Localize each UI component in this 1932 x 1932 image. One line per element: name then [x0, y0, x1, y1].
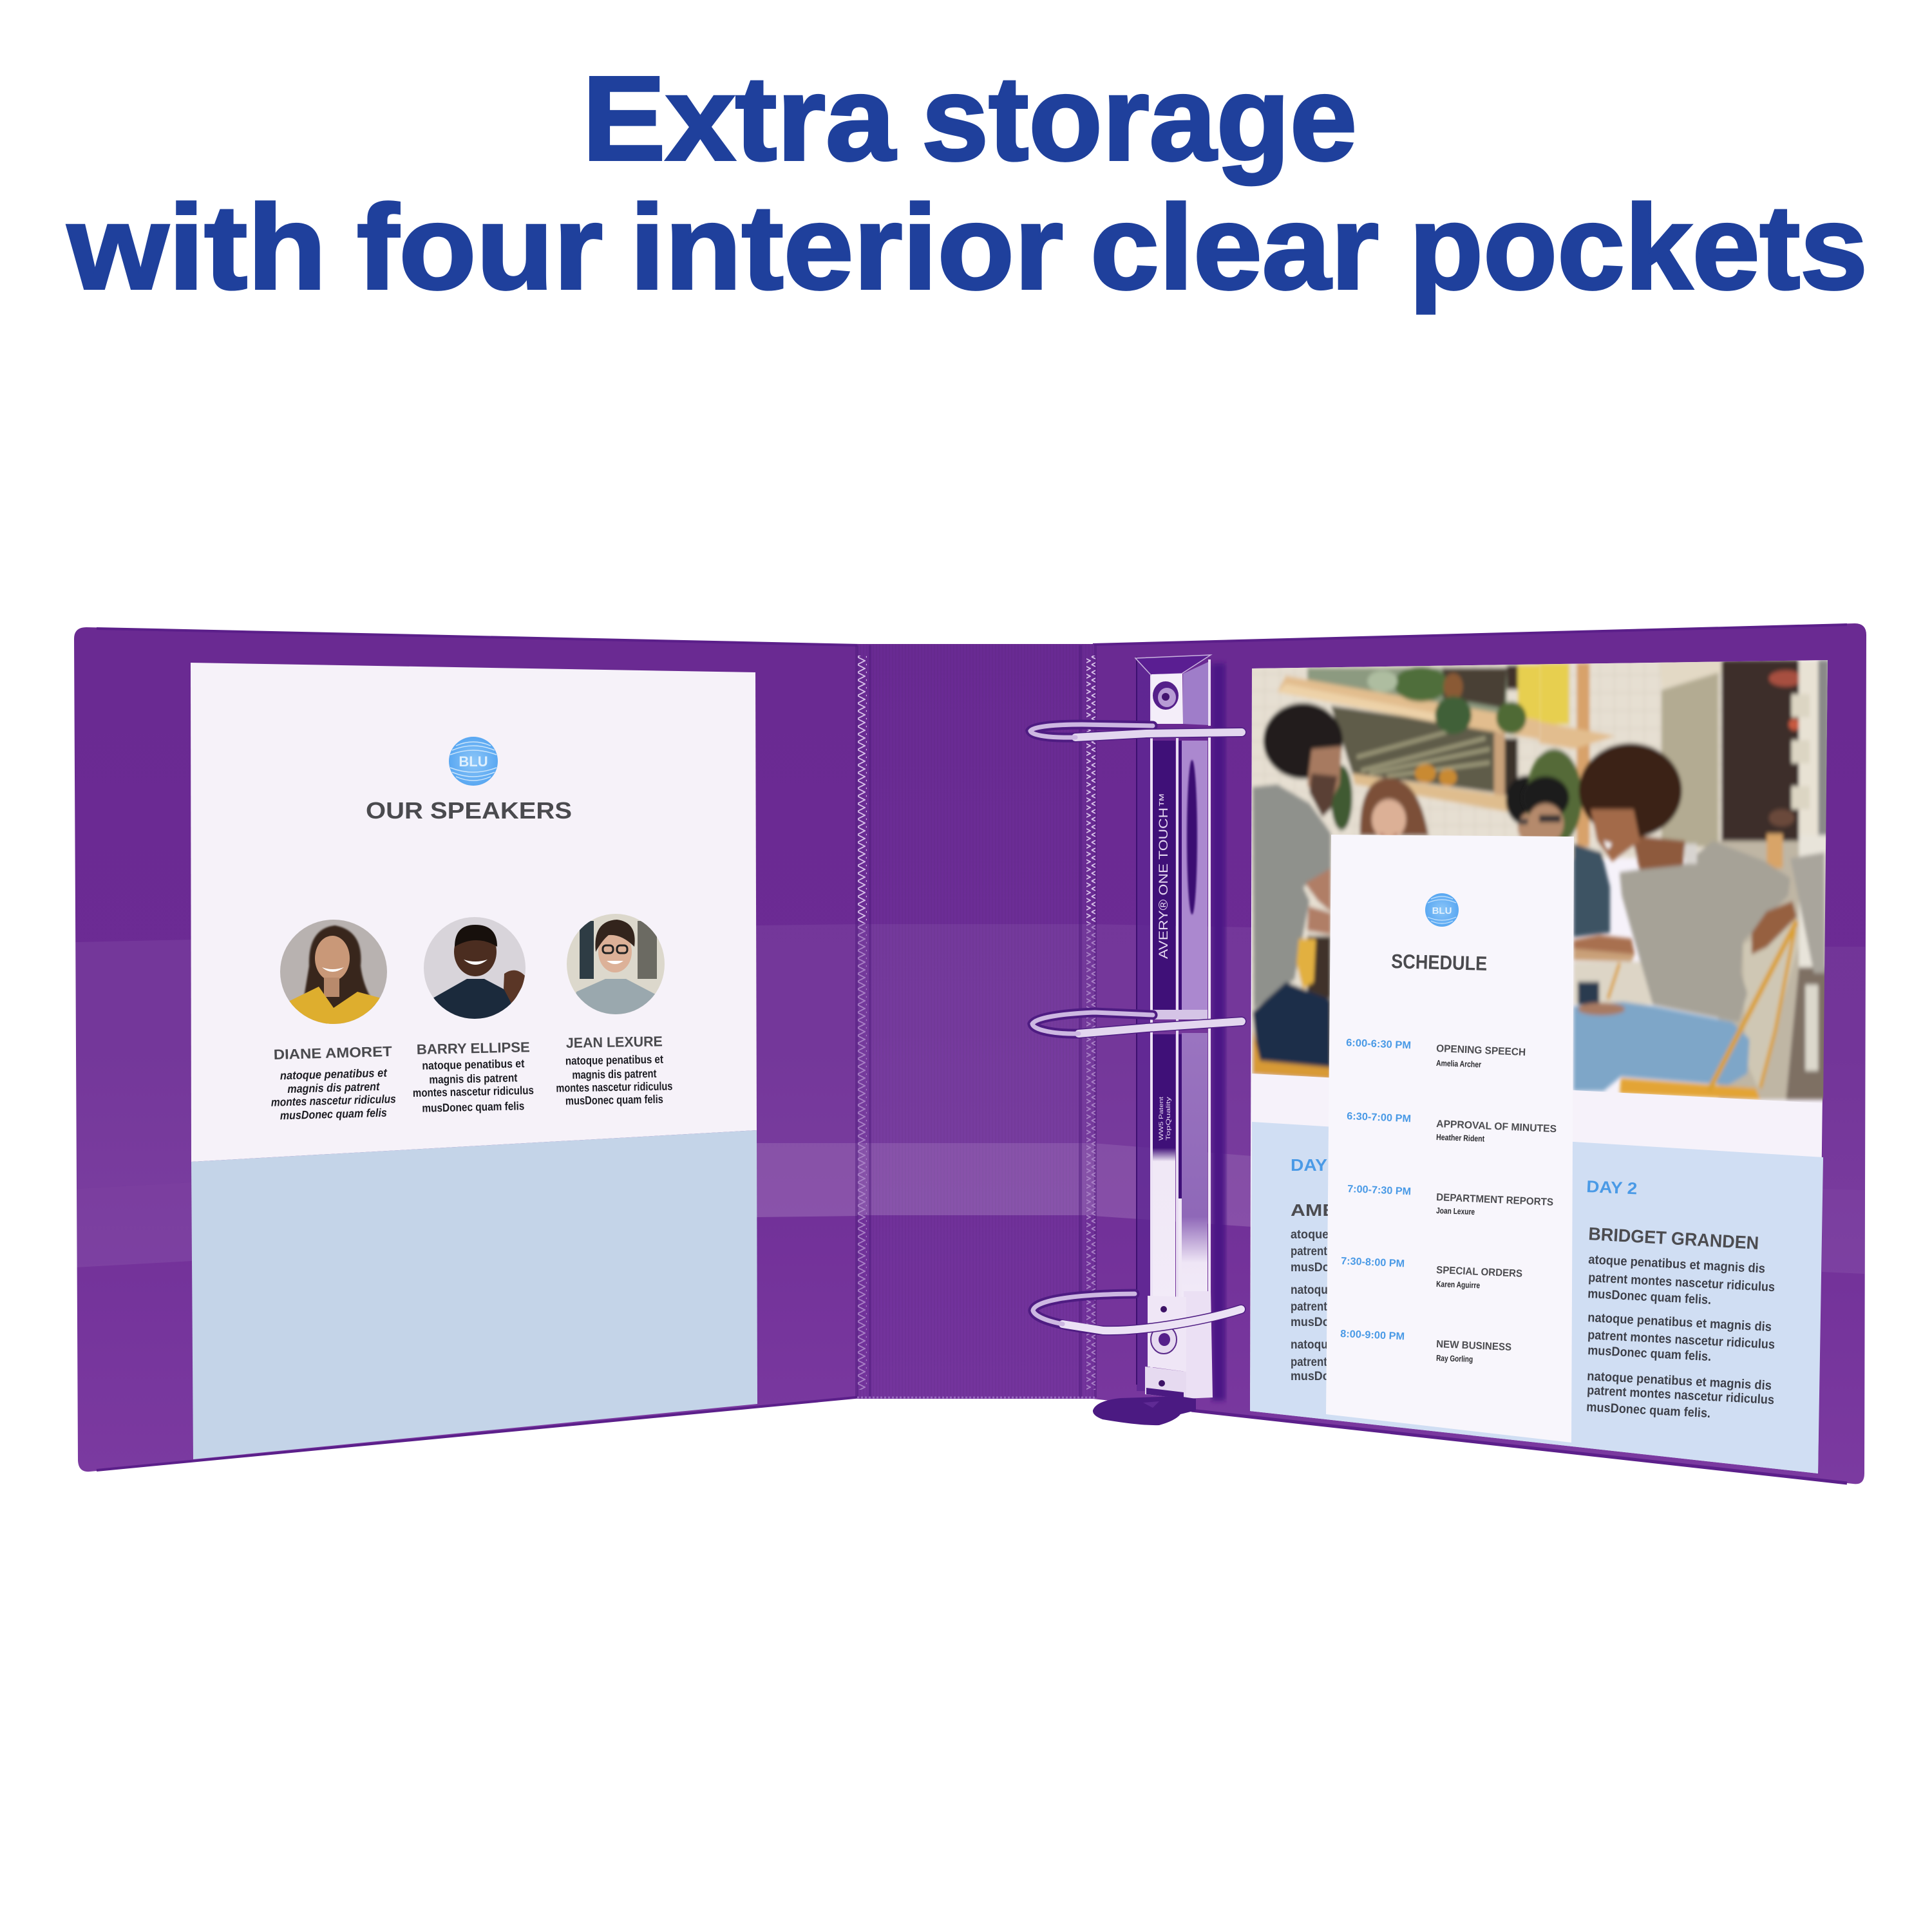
speaker: jean lexure	[556, 1033, 673, 1107]
day 1 column: patrent montes nascetur ridiculus	[1291, 1245, 1464, 1258]
title: four	[357, 181, 603, 314]
schedule row 3	[1347, 1184, 1554, 1217]
icon: top rivet	[1153, 681, 1179, 710]
schedule row 3: 7:00-7:30 PM	[1347, 1184, 1411, 1197]
panel: schedule card	[1326, 835, 1574, 1443]
schedule row 3: DEPARTMENT REPORTS	[1436, 1192, 1554, 1208]
dark strip lower	[1179, 1034, 1182, 1198]
day 2 column	[1586, 1177, 1775, 1421]
lower plate right	[1184, 1291, 1213, 1399]
title: with	[67, 181, 327, 314]
day 2 column: patrent montes nascetur ridiculus	[1588, 1271, 1775, 1294]
upper foot reflection	[1153, 1010, 1208, 1019]
speaker: barry ellipse: BARRY ELLIPSE	[417, 1039, 530, 1057]
left bright edge	[1150, 670, 1153, 1391]
day 2 column: musDonec quam felis.	[1587, 1287, 1712, 1307]
photo right half	[1522, 657, 1829, 1099]
schedule row 2	[1347, 1111, 1557, 1144]
schedule row 4	[1341, 1256, 1523, 1290]
title: clear	[1090, 181, 1379, 314]
upper plate	[1151, 674, 1183, 724]
speaker: barry ellipse: musDonec quam felis	[422, 1099, 525, 1115]
speaker: barry ellipse: montes nascetur ridiculus	[413, 1084, 534, 1099]
speaker: barry ellipse	[413, 1039, 534, 1115]
spine clear band lower	[857, 1143, 1094, 1215]
title	[67, 52, 1868, 314]
day 1 column: atoque penatibus et magnis dis	[1291, 1228, 1464, 1242]
schedule row 1: Amelia Archer	[1436, 1058, 1481, 1069]
day 1 column: musDonec quam felis.	[1291, 1316, 1413, 1329]
day 2 column: musDonec quam felis.	[1586, 1400, 1711, 1421]
binder	[74, 623, 1866, 1484]
day 2 column: natoque penatibus et magnis dis	[1587, 1369, 1772, 1393]
day 1 column: natoque penatibus et magnis dis	[1291, 1283, 1464, 1297]
day 1 column: AMELIA ARCHER	[1291, 1200, 1461, 1220]
day 2 column: patrent montes nascetur ridiculus	[1587, 1383, 1774, 1407]
left pocket lower band, inner strip	[757, 1143, 861, 1217]
schedule row 5	[1340, 1329, 1512, 1364]
speaker: diane amoret: montes nascetur ridiculus	[271, 1092, 396, 1109]
speaker: jean lexure: natoque penatibus et	[565, 1053, 663, 1067]
stitching right upper	[1086, 656, 1095, 923]
schedule row 1: OPENING SPEECH	[1436, 1043, 1526, 1058]
patent text: WW5 Patent	[1158, 1096, 1164, 1141]
upper right plate	[1183, 662, 1209, 725]
title: storage	[922, 52, 1357, 185]
heading: our speakers: OUR SPEAKERS	[366, 797, 572, 824]
mechanism shadow	[1211, 663, 1226, 1401]
left pocket lower band, outer strip	[76, 1182, 192, 1267]
day 1 column: musDonec quam felis.	[1291, 1261, 1413, 1274]
ring top	[1030, 724, 1242, 737]
speaker: diane amoret: magnis dis patrent	[287, 1080, 380, 1095]
right bright edge	[1208, 737, 1211, 1311]
day 2 column: DAY 2	[1586, 1177, 1638, 1198]
icon: bottom rivet	[1151, 1325, 1177, 1354]
portrait: barry	[424, 917, 526, 1019]
day 1 column	[1291, 1155, 1464, 1383]
speaker: jean lexure: magnis dis patrent	[572, 1067, 657, 1081]
speaker: jean lexure: JEAN LEXURE	[566, 1033, 663, 1051]
schedule row 4: 7:30-8:00 PM	[1341, 1256, 1405, 1269]
left pocket upper band, outer strip	[75, 940, 192, 1189]
icon: binder lever clip	[1093, 1396, 1196, 1425]
ring bottom	[1033, 1294, 1241, 1331]
top end cap	[1135, 655, 1211, 675]
brand text: AVERY® ONE TOUCH™	[1157, 793, 1171, 959]
schedule row 3: Joan Lexure	[1436, 1206, 1475, 1217]
ring middle	[1032, 1012, 1242, 1034]
day 2 column: BRIDGET GRANDEN	[1588, 1224, 1759, 1253]
day 1 column: DAY 1	[1291, 1155, 1342, 1175]
paper sheet	[1250, 660, 1828, 1473]
speaker: barry ellipse: natoque penatibus et	[422, 1057, 525, 1072]
speaker: jean lexure: montes nascetur ridiculus	[556, 1079, 673, 1095]
schedule row 5: NEW BUSINESS	[1436, 1339, 1512, 1353]
speaker: barry ellipse: magnis dis patrent	[429, 1071, 518, 1086]
speaker: jean lexure: musDonec quam felis	[565, 1093, 663, 1107]
spine clear band upper	[857, 924, 1094, 1143]
schedule row 1	[1346, 1037, 1526, 1069]
dark strip	[1179, 741, 1182, 1011]
day 1 column: patrent montes nascetur ridiculus	[1291, 1356, 1464, 1369]
icon: ring mechanism	[1135, 655, 1213, 1399]
day 1 column: musDonec quam felis.	[1291, 1370, 1413, 1383]
card sheet	[1326, 835, 1574, 1443]
stitching right lower	[1086, 923, 1095, 1390]
schedule row 4: Karen Aguirre	[1436, 1279, 1480, 1290]
side plate upper	[1182, 741, 1208, 1011]
day 1 column: natoque penatibus et magnis dis	[1291, 1338, 1464, 1352]
lower clamp	[1145, 1367, 1186, 1399]
panel: left cover	[74, 627, 862, 1472]
day 1 column: patrent montes nascetur ridiculus	[1291, 1300, 1464, 1314]
center channel lower	[1153, 1034, 1175, 1305]
left pocket upper band, inner strip	[755, 924, 860, 1143]
schedule row 5: Ray Gorling	[1436, 1353, 1473, 1364]
icon: ring mechanism: TopQuality	[1165, 1096, 1171, 1141]
stitching left lower	[858, 923, 867, 1390]
blue paper section	[1250, 1122, 1823, 1473]
schedule row 2: 6:30-7:00 PM	[1347, 1111, 1411, 1124]
hinge seams	[855, 645, 1097, 1397]
schedule row 2: APPROVAL OF MINUTES	[1436, 1119, 1557, 1135]
left rail panel	[1137, 663, 1150, 1391]
panel: right cover	[1093, 623, 1866, 1484]
portrait: diane	[280, 920, 387, 1024]
stitching left upper	[858, 656, 867, 923]
schedule row 1: 6:00-6:30 PM	[1346, 1037, 1411, 1051]
side plate lower	[1182, 1033, 1208, 1303]
title: interior	[630, 181, 1063, 314]
paper sheet	[191, 663, 757, 1162]
day 2 column: musDonec quam felis.	[1587, 1343, 1712, 1364]
side plate reflection	[1187, 760, 1197, 914]
icon: blu logo	[449, 737, 498, 786]
portrait: jean	[567, 914, 665, 1014]
lower plate left	[1148, 1296, 1186, 1372]
title: pockets	[1409, 181, 1868, 314]
icon: blu logo small	[1425, 893, 1459, 927]
icon: binder rings	[1030, 724, 1242, 1331]
day 2 column: patrent montes nascetur ridiculus	[1587, 1328, 1775, 1352]
center channel upper	[1153, 741, 1175, 1011]
photo: friends in cafe	[1249, 657, 1829, 1099]
schedule row 5: 8:00-9:00 PM	[1340, 1329, 1405, 1342]
bottom seam	[857, 1396, 1095, 1399]
heading: schedule: SCHEDULE	[1391, 950, 1488, 975]
speaker: diane amoret: natoque penatibus et	[280, 1066, 388, 1082]
icon: blu logo small: BLU	[1432, 905, 1452, 916]
bright strip	[1176, 738, 1179, 1305]
speaker: diane amoret: DIANE AMORET	[273, 1043, 393, 1063]
blue paper section	[191, 1130, 757, 1459]
speaker: diane amoret	[271, 1043, 396, 1122]
icon: blu logo: BLU	[459, 753, 488, 770]
title: Extra	[582, 52, 896, 185]
panel: right paper	[1249, 657, 1829, 1473]
panel: spine	[855, 644, 1097, 1399]
speaker: diane amoret: musDonec quam felis	[280, 1106, 387, 1122]
day 2 column: natoque penatibus et magnis dis	[1587, 1311, 1772, 1334]
schedule row 2: Heather Rident	[1436, 1132, 1485, 1144]
panel: left paper, our speakers	[191, 663, 757, 1459]
photo left half	[1249, 657, 1548, 1090]
schedule row 4: SPECIAL ORDERS	[1436, 1265, 1523, 1280]
day 2 column: atoque penatibus et magnis dis	[1588, 1253, 1766, 1276]
